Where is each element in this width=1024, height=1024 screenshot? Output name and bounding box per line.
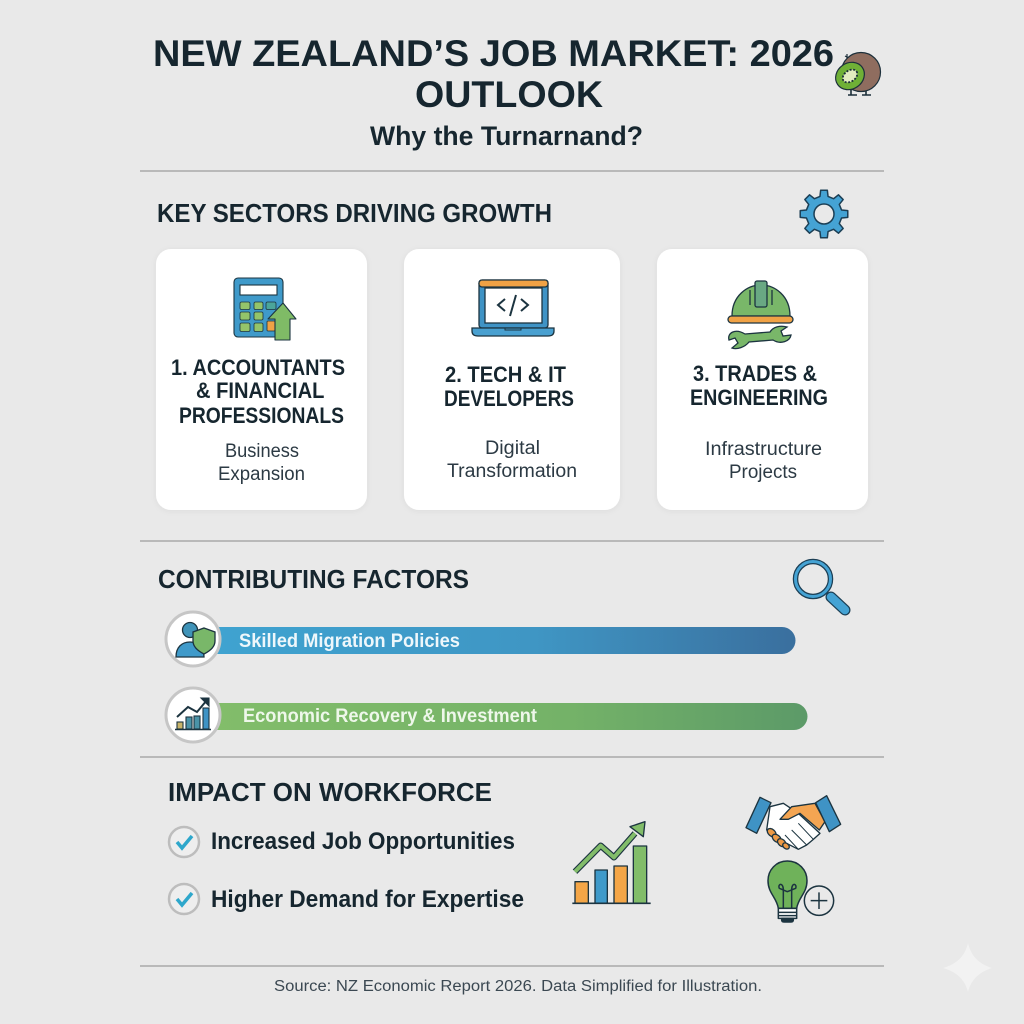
checklist item: job opportunities: Increased Job Opportunities — [211, 828, 515, 855]
title: NEW ZEALAND’S JOB MARKET: 2026 — [153, 33, 834, 74]
icon: growth chart — [166, 688, 220, 742]
bar: skilled migration — [166, 612, 796, 666]
panel: accountants — [156, 249, 367, 510]
icon: hard hat and wrench — [728, 281, 793, 349]
bar label: Economic Recovery & Investment — [243, 706, 538, 727]
card heading: PROFESSIONALS — [179, 403, 344, 428]
icon: gear — [800, 190, 848, 238]
card heading: 2. TECH & IT — [445, 362, 567, 387]
card description: Business — [225, 441, 299, 462]
divider — [140, 965, 884, 967]
source note: Source: NZ Economic Report 2026. Data Simplified for Illustration. — [274, 978, 762, 995]
card heading: 3. TRADES & — [693, 361, 817, 386]
divider — [140, 170, 884, 172]
subtitle: Why the Turnarnand? — [370, 121, 643, 151]
icon: calculator with arrow — [234, 278, 296, 340]
card description: Projects — [729, 462, 797, 483]
divider — [140, 540, 884, 542]
divider — [140, 756, 884, 758]
card description: Expansion — [218, 464, 305, 485]
panel: tech — [404, 249, 620, 510]
card heading: DEVELOPERS — [444, 386, 574, 411]
icon: handshake — [746, 796, 841, 850]
icon: lightbulb with plus — [768, 861, 834, 922]
card heading: 1. ACCOUNTANTS — [171, 355, 345, 380]
heading: key sectors: KEY SECTORS DRIVING GROWTH — [157, 198, 552, 228]
bar label: Skilled Migration Policies — [239, 631, 460, 652]
heading: contributing factors: CONTRIBUTING FACTORS — [158, 564, 469, 594]
icon: kiwi fruit — [830, 52, 880, 95]
card heading: & FINANCIAL — [196, 378, 324, 403]
panel: trades — [657, 249, 868, 510]
bar: economic recovery — [166, 688, 808, 742]
card heading: ENGINEERING — [690, 385, 828, 410]
heading: impact on workforce: IMPACT ON WORKFORCE — [168, 777, 492, 807]
checklist item: demand for expertise: Higher Demand for Expertise — [211, 886, 524, 913]
watermark sparkle — [943, 943, 992, 992]
title — [153, 33, 834, 115]
icon: laptop — [472, 280, 554, 336]
card description: Infrastructure — [705, 439, 822, 460]
card description: Digital — [485, 438, 540, 459]
card description: Transformation — [447, 461, 577, 482]
icon: magnifying glass — [796, 562, 845, 610]
icon: bar chart with arrow — [572, 822, 651, 903]
title: OUTLOOK — [415, 74, 603, 115]
icon: person with shield — [166, 612, 220, 666]
